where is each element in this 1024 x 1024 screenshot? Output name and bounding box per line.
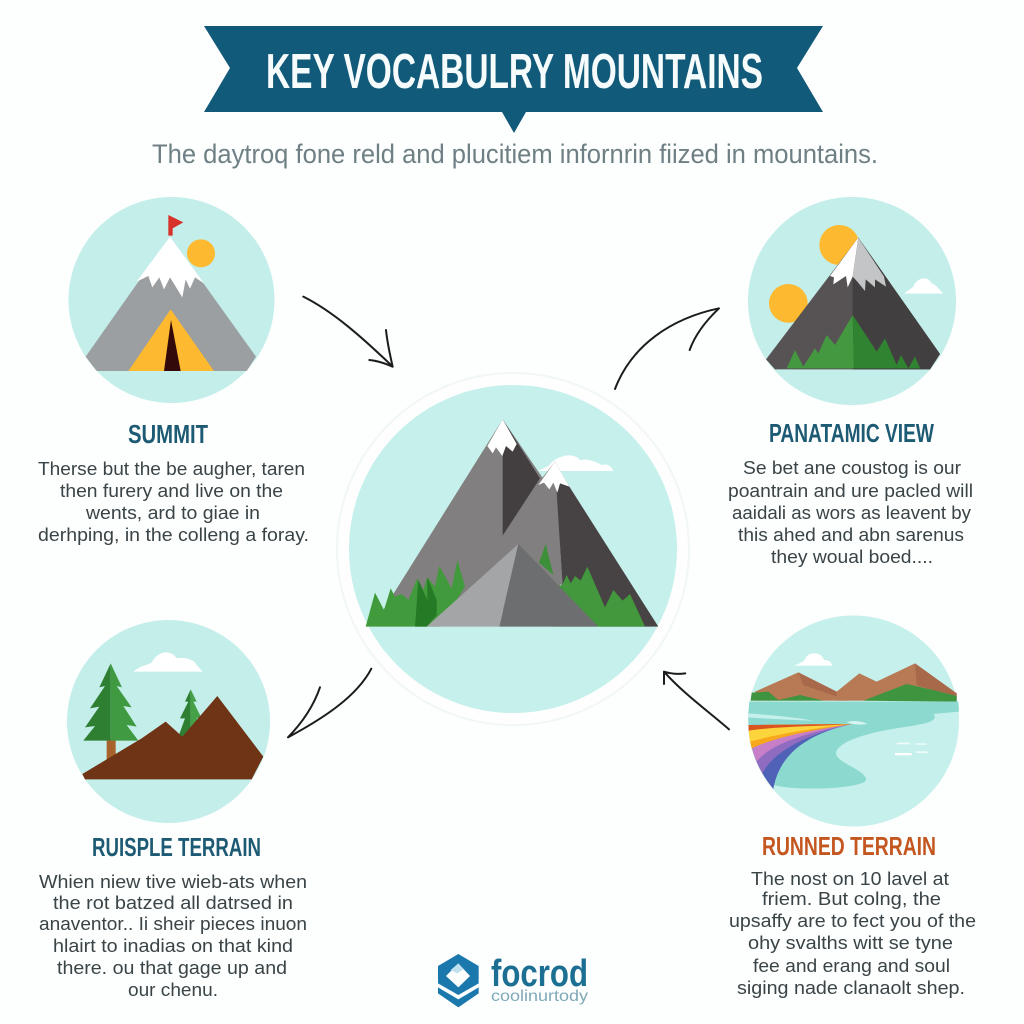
icon: hexagon logo mark [438, 954, 479, 1007]
title: KEY VOCABULRY MOUNTAINS [266, 45, 763, 99]
text: runned terrain description [729, 868, 976, 998]
panel: rugged terrain [39, 620, 307, 1000]
text: summit description [38, 458, 309, 545]
subtitle: The daytroq fone reld and plucitiem infornrin fiized in mountains. [152, 139, 878, 169]
text: panoramic view description: this ahed and abn sarenus [738, 524, 964, 545]
arrow: runned terrain to centre [664, 672, 729, 729]
text: summit description: derhping, in the colleng a foray. [38, 524, 309, 545]
text: runned terrain description: fee and erang and soul [753, 955, 950, 976]
heading: panoramic view: PANATAMIC VIEW [769, 418, 934, 448]
logo: focrod [438, 953, 588, 1007]
heading: runned terrain: RUNNED TERRAIN [762, 831, 936, 861]
text: summit description: wents, ard to giae in [85, 502, 260, 523]
text: runned terrain description: friem. But colng, the [762, 888, 941, 909]
text: rugged terrain description: there. ou that gage up and [57, 957, 287, 978]
logo tagline: coolinurtody [491, 988, 588, 1005]
icon: river with rainbow and hills [748, 616, 959, 826]
text: runned terrain description: The nost on 10 lavel at [751, 868, 949, 889]
arrow: centre to rugged terrain [288, 669, 371, 737]
text: rugged terrain description: our chenu. [128, 979, 218, 1000]
central illustration: mountain range [337, 373, 689, 725]
panel: runned terrain [729, 616, 976, 998]
text: runned terrain description: upsaffy are to fect you of the [729, 910, 976, 931]
text: panoramic view description [728, 457, 973, 567]
logo wordmark: focrod [491, 953, 588, 995]
text: rugged terrain description: the rot batzed all datrsed in [53, 892, 293, 913]
text: panoramic view description: aaidali as wors as leavent by [732, 502, 972, 523]
text: rugged terrain description: Whien niew tive wieb-ats when [39, 871, 307, 892]
text: rugged terrain description [39, 871, 307, 1000]
panel: panoramic view [728, 197, 973, 567]
panel: summit [38, 197, 309, 545]
arrow: centre to panoramic view [615, 308, 719, 389]
icon: summit mountain with tent [68, 197, 274, 403]
text: summit description: Therse but the be augher, taren [38, 458, 305, 479]
text: rugged terrain description: anaventor.. Ii sheir pieces inuon [39, 913, 307, 934]
text: runned terrain description: ohy svalths witt se tyne [748, 932, 953, 953]
title banner [204, 26, 823, 133]
icon: dark mountain with two suns [748, 197, 956, 405]
text: runned terrain description: siging nade clanaolt shep. [737, 977, 965, 998]
arrow: summit to centre [303, 297, 393, 367]
icon: trees and brown hills [67, 620, 270, 823]
heading: rugged terrain: RUISPLE TERRAIN [92, 832, 261, 862]
text: panoramic view description: poantrain and ure pacled will [728, 480, 973, 501]
text: panoramic view description: they woual boed.... [771, 546, 933, 567]
heading: summit: SUMMIT [128, 419, 208, 449]
text: rugged terrain description: hlairt to inadias on that kind [53, 935, 293, 956]
text: panoramic view description: Se bet ane coustog is our [743, 457, 961, 478]
text: summit description: then furery and live on the [60, 480, 283, 501]
